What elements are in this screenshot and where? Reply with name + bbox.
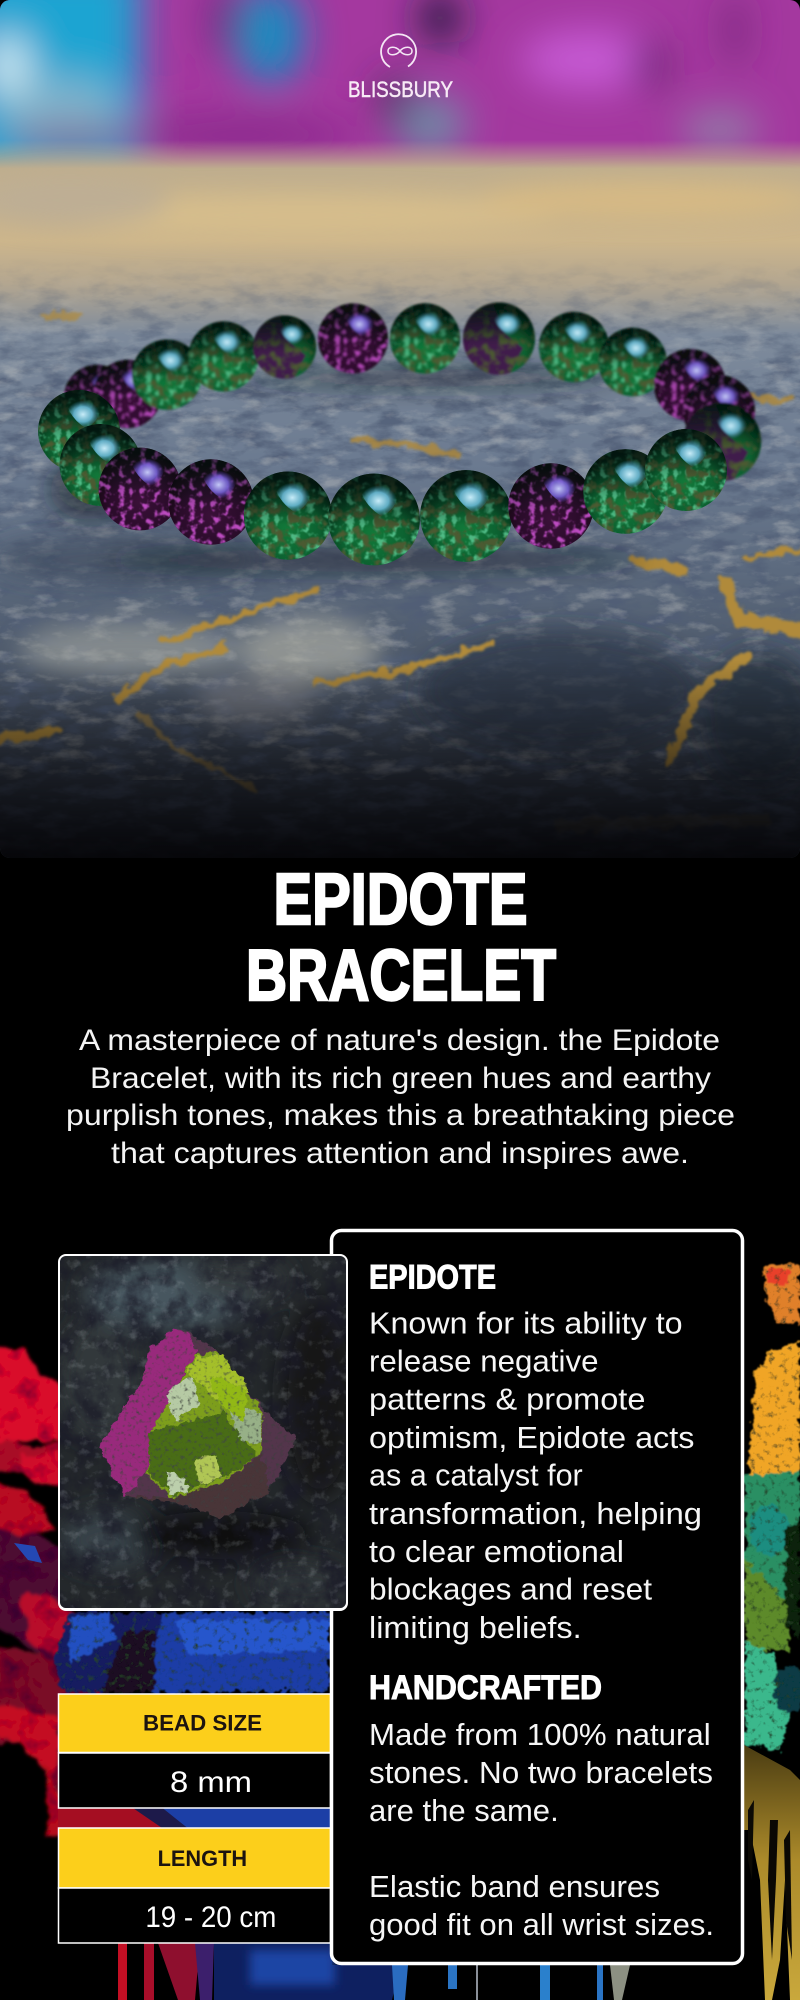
intro paragraph: A masterpiece of nature's design. the Epidote [79, 1024, 720, 1057]
bottom fade to black [0, 660, 800, 860]
hero photo: bracelet on rock [0, 0, 800, 860]
intro paragraph: Bracelet, with its rich green hues and earthy [90, 1062, 711, 1095]
heading: epidote: EPIDOTE [369, 1258, 496, 1296]
handcrafted description: Elastic band ensures [369, 1870, 660, 1904]
epidote description: as a catalyst for [369, 1459, 583, 1493]
info panel [332, 1230, 742, 1964]
epidote description: blockages and reset [369, 1573, 653, 1607]
handcrafted description: stones. No two bracelets [369, 1756, 713, 1790]
photo: epidote stone [58, 1254, 360, 1611]
handcrafted description: good fit on all wrist sizes. [369, 1908, 714, 1942]
epidote description: to clear emotional [369, 1535, 624, 1569]
handcrafted description: Made from 100% natural [369, 1718, 711, 1752]
epidote description: patterns & promote [369, 1383, 645, 1417]
blurred graffiti wall [0, 0, 800, 168]
spec table: bead size: 8 mm [170, 1766, 252, 1799]
spec table: bead size: BEAD SIZE [143, 1710, 262, 1736]
epidote description: optimism, Epidote acts [369, 1421, 694, 1455]
ground shadow [50, 368, 646, 572]
epidote description: transformation, helping [369, 1497, 702, 1531]
paint splash: left and bottom [0, 1350, 630, 2000]
brand logo [348, 34, 453, 102]
epidote description: limiting beliefs. [369, 1611, 582, 1645]
strip between the spec tables [58, 1806, 330, 1830]
intro paragraph [66, 1024, 735, 1170]
intro paragraph: that captures attention and inspires awe. [111, 1137, 689, 1170]
icon: infinity ring [381, 34, 416, 67]
far side beads [64, 302, 761, 481]
gold cracks [0, 316, 800, 825]
epidote description: release negative [369, 1345, 598, 1379]
brand name: BLISSBURY [348, 77, 453, 102]
heading: handcrafted: HANDCRAFTED [369, 1669, 602, 1707]
spec table: length: LENGTH [158, 1846, 247, 1871]
mineral [100, 1328, 296, 1518]
title [246, 860, 556, 1016]
spec table: length [58, 1828, 330, 1943]
title: BRACELET [246, 936, 556, 1016]
spec table: bead size [58, 1694, 330, 1808]
paint splash: right [744, 1262, 800, 2000]
epidote description [369, 1306, 702, 1645]
bracelet [38, 302, 761, 572]
dark rock texture [60, 1256, 346, 1608]
near side beads [38, 390, 727, 565]
handcrafted description: are the same. [369, 1794, 559, 1828]
bottom drips [118, 1943, 630, 2000]
handcrafted description [369, 1718, 714, 1942]
sand and rock ground [0, 140, 800, 860]
title: EPIDOTE [274, 860, 528, 940]
intro paragraph: purplish tones, makes this a breathtaking piece [66, 1099, 735, 1132]
epidote description: Known for its ability to [369, 1306, 683, 1340]
spec table: length: 19 - 20 cm [145, 1901, 276, 1934]
